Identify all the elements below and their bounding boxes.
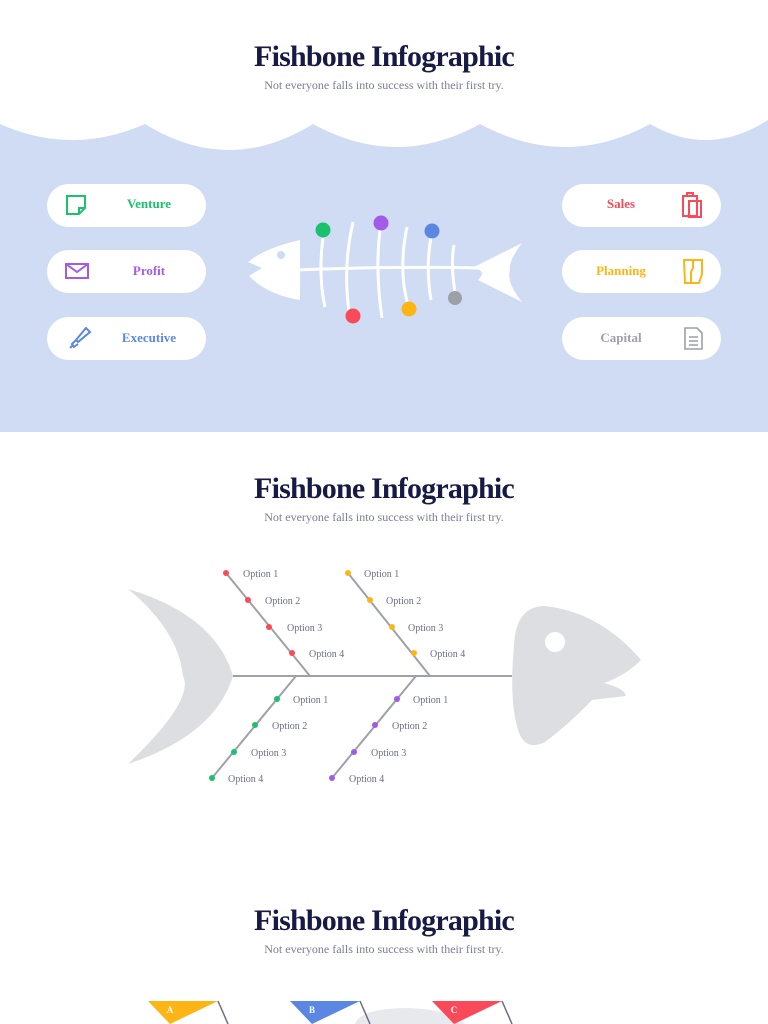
fishbone diagram: Option 2: [272, 721, 307, 732]
head: [512, 606, 641, 745]
pill: Executive: Executive: [122, 330, 176, 345]
fishbone diagram: Option 4: [430, 649, 465, 660]
fishbone diagram: Option 1: [413, 695, 448, 706]
fishbone diagram: Option 1: [364, 569, 399, 580]
pill: Executive: [47, 317, 206, 360]
fishbone diagram: Option 4: [228, 774, 263, 785]
title 1: Fishbone Infographic: [254, 40, 514, 73]
title 3: Not everyone falls into success with their first try.: [264, 942, 504, 956]
flags row: B: [309, 1005, 315, 1015]
flags row: C: [451, 1005, 457, 1015]
fishbone diagram: Option 3: [287, 623, 322, 634]
pill: Sales: [562, 184, 721, 227]
icon: folder: [684, 260, 702, 283]
fishbone diagram: Option 1: [243, 569, 278, 580]
fishbone diagram: Option 4: [309, 649, 344, 660]
tail: [128, 589, 233, 764]
pill: Planning: [562, 250, 721, 293]
fish skeleton: [248, 216, 522, 324]
pill: Venture: Venture: [127, 196, 171, 211]
pill: Planning: Planning: [596, 263, 646, 278]
pill: Capital: [562, 317, 721, 360]
fishbone diagram: Option 2: [386, 596, 421, 607]
pill: Venture: [47, 184, 206, 227]
title 2: [254, 472, 514, 524]
fishbone diagram: Option 2: [392, 721, 427, 732]
pill: Profit: [47, 250, 206, 293]
title 2: Not everyone falls into success with their first try.: [264, 510, 504, 524]
pill: Profit: Profit: [133, 263, 166, 278]
fishbone diagram: Option 4: [349, 774, 384, 785]
pill: Sales: Sales: [607, 196, 635, 211]
title 1: [254, 40, 514, 92]
icon: document: [685, 328, 702, 349]
icon: clipboard: [683, 193, 701, 217]
icon: marker: [70, 328, 90, 348]
fishbone diagram: Option 3: [408, 623, 443, 634]
title 1: Not everyone falls into success with their first try.: [264, 78, 504, 92]
flags row: A: [167, 1005, 174, 1015]
fishbone diagram: Option 2: [265, 596, 300, 607]
title 3: Fishbone Infographic: [254, 904, 514, 937]
fishbone diagram: Option 1: [293, 695, 328, 706]
pill: Capital: Capital: [600, 330, 642, 345]
panel: wave background: [0, 120, 768, 432]
title 3: [254, 904, 514, 956]
flags row: [148, 1001, 512, 1024]
title 2: Fishbone Infographic: [254, 472, 514, 505]
dots: [316, 222, 330, 238]
fishbone diagram: Option 3: [371, 748, 406, 759]
icon: note: [67, 196, 85, 214]
fishbone diagram: Option 3: [251, 748, 286, 759]
fishbone diagram: [128, 569, 641, 785]
icon: envelope: [66, 264, 88, 278]
